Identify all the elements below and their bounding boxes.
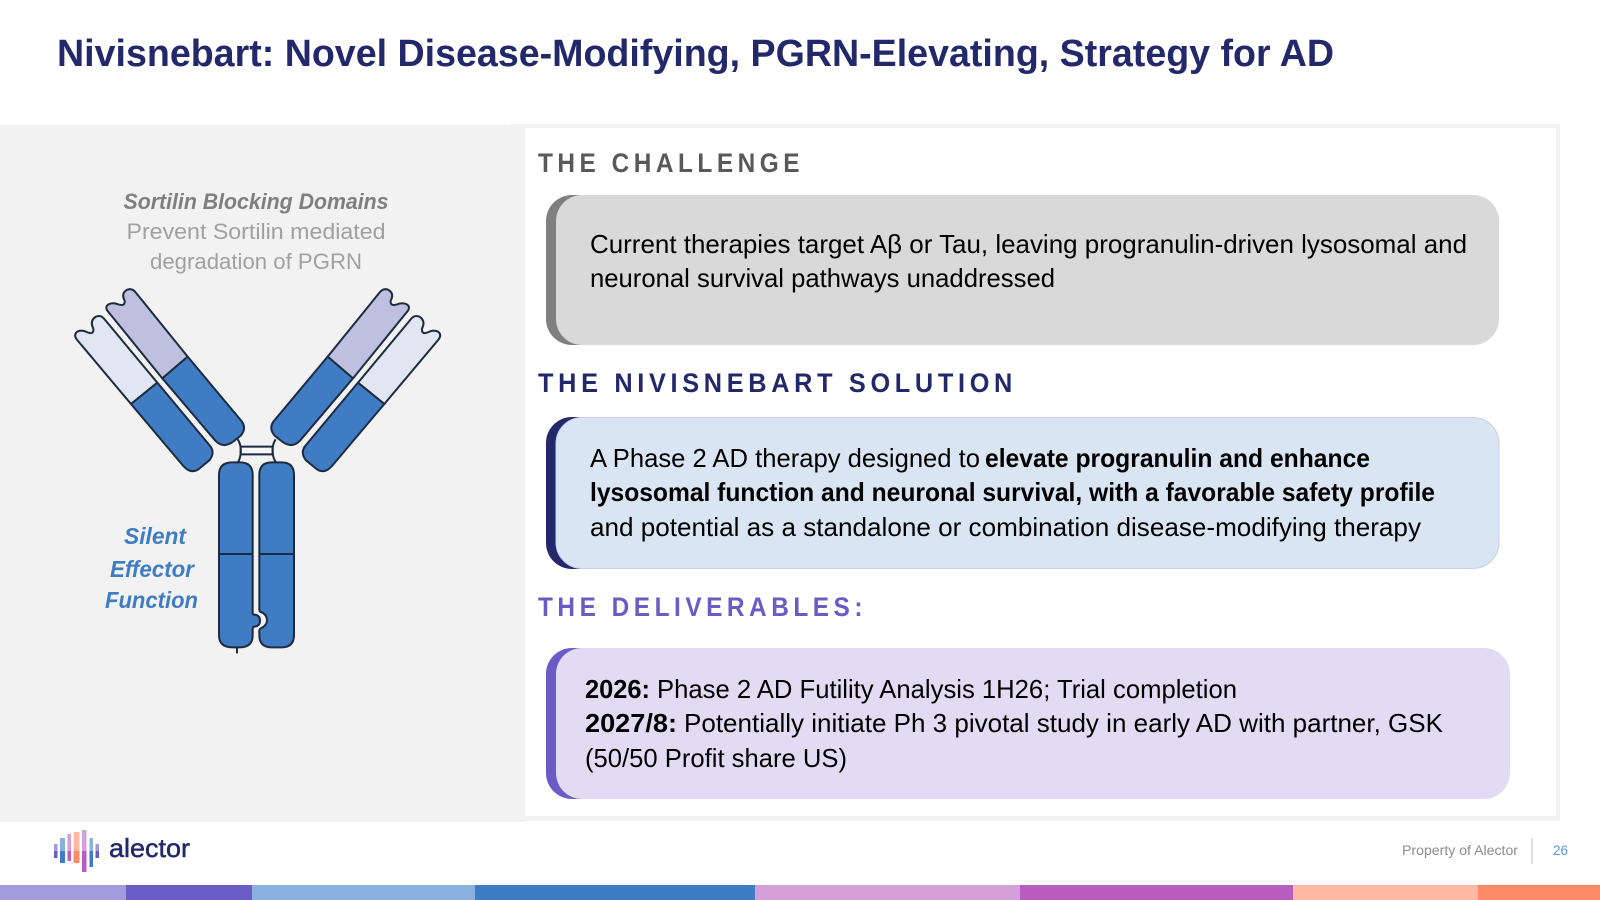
card: challenge — [546, 195, 1499, 345]
outer chain — [75, 316, 213, 471]
label: silent effector function: Silent — [124, 523, 187, 549]
heading: the deliverables: THE DELIVERABLES: — [538, 592, 867, 622]
hinge — [238, 439, 276, 463]
card: solution: A Phase 2 AD therapy designed to — [590, 443, 980, 473]
page number: 26 — [1553, 842, 1568, 858]
footer text: property of alector: Property of Alector — [1402, 843, 1519, 858]
stem right — [259, 462, 294, 647]
card: deliverables: Potentially initiate Ph 3 pivotal study in early AD with partner, GSK — [684, 708, 1444, 738]
left arm — [75, 289, 244, 471]
card: solution: elevate progranulin and enhance — [985, 443, 1370, 473]
heading: the challenge: THE CHALLENGE — [538, 148, 804, 178]
panel: antibody background — [0, 125, 525, 822]
label: silent effector function: Function — [105, 587, 198, 613]
label: sortilin blocking domains: degradation of PGRN — [150, 249, 362, 274]
label: sortilin blocking domains — [124, 189, 388, 274]
logo: alector — [54, 830, 190, 872]
card: deliverables: Phase 2 AD Futility Analysis 1H26; Trial completion — [657, 674, 1237, 704]
label: sortilin blocking domains: Prevent Sortilin mediated — [126, 219, 386, 244]
title: Nivisnebart: Novel Disease-Modifying, PGRN-Elevating, Strategy for AD — [57, 33, 1334, 75]
card: deliverables — [546, 648, 1510, 799]
label: sortilin blocking domains: Sortilin Blocking Domains — [124, 189, 388, 214]
card: challenge: neuronal survival pathways unaddressed — [590, 263, 1055, 293]
card: solution: lysosomal function and neuronal survival, with a favorable safety profile — [590, 477, 1435, 507]
right arm — [271, 289, 440, 471]
stem left — [219, 462, 260, 647]
card: deliverables: 2026: — [585, 674, 650, 704]
logo: alector: alector — [109, 833, 190, 863]
label: silent effector function: Effector — [110, 556, 195, 582]
footer colour band — [0, 885, 1600, 900]
inner chain — [271, 289, 409, 445]
card: solution: and potential as a standalone or combination disease-modifying therapy — [590, 512, 1421, 542]
heading: the nivisnebart solution: THE NIVISNEBART SOLUTION — [538, 368, 1017, 398]
diagram: antibody — [75, 289, 440, 653]
label: silent effector function — [105, 523, 198, 613]
card: deliverables: 2027/8: — [585, 708, 677, 738]
outer chain — [303, 316, 440, 471]
card: challenge: Current therapies target Aβ or Tau, leaving progranulin-driven lysosomal and — [590, 229, 1467, 259]
inner chain — [106, 289, 244, 445]
panel: content frame — [510, 124, 1560, 821]
card: solution — [546, 417, 1499, 569]
card: deliverables: (50/50 Profit share US) — [585, 743, 847, 773]
